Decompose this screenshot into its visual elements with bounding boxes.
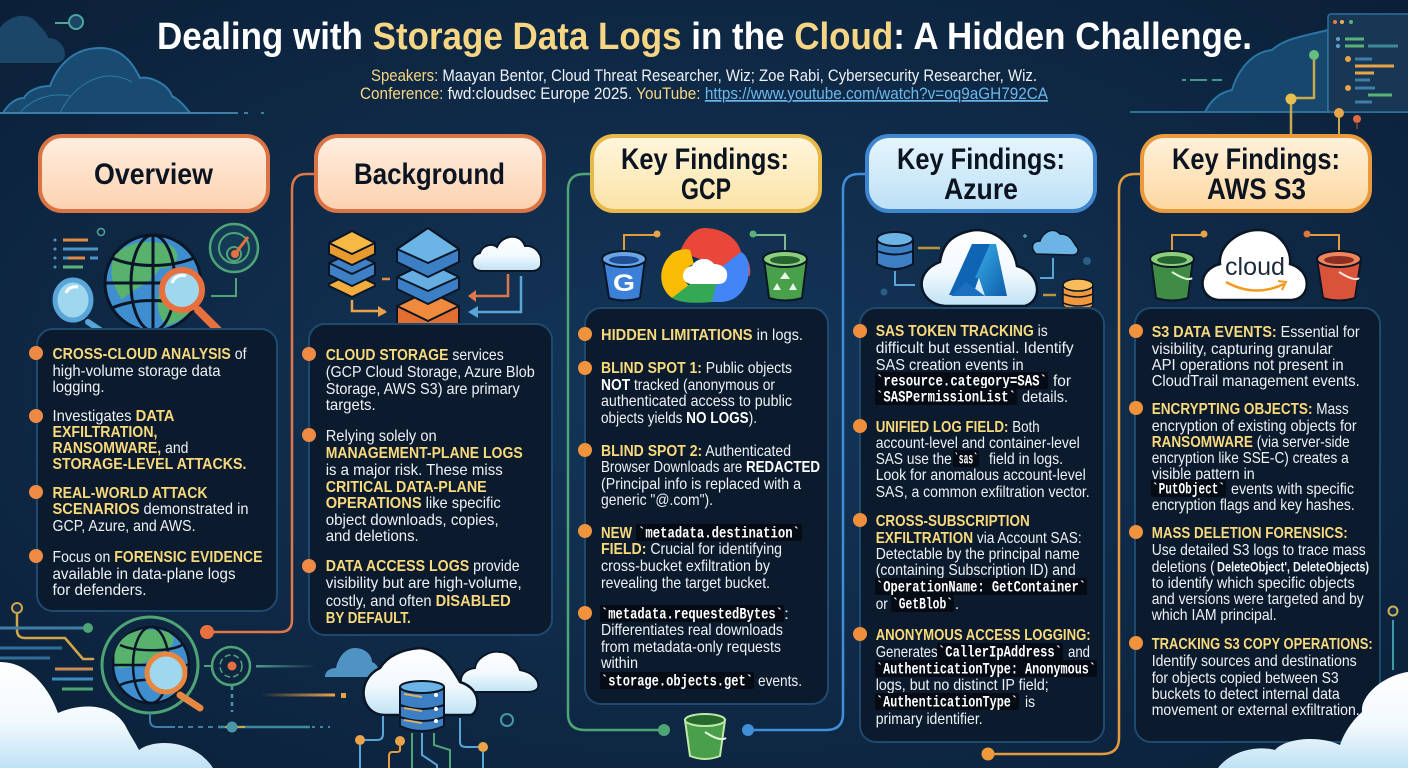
icon: storage stacks and cloud xyxy=(329,228,541,334)
heading: Key Findings Azure: Key Findings: xyxy=(897,143,1065,176)
item: unified log field xyxy=(853,419,1090,501)
item: s3 data events: CloudTrail management events. xyxy=(1152,373,1360,390)
item: tracking s3 copy operations xyxy=(1129,636,1373,719)
item: cross-subscription exfiltration: CROSS-SUBSCRIPTION xyxy=(876,513,1030,530)
item: tracking s3 copy operations: Identify sources and destinations xyxy=(1152,653,1357,670)
item: mass deletion forensics: MASS DELETION FORENSICS: xyxy=(1152,525,1348,542)
item: blind spot 1 xyxy=(578,360,792,427)
heading: Key Findings GCP xyxy=(592,136,820,211)
item: cloud storage: Storage, AWS S3) are primary xyxy=(326,381,520,398)
item: forensic evidence: for defenders. xyxy=(52,582,146,599)
item: metadata requestedBytes: events. xyxy=(758,673,802,690)
item: management-plane logs: Relying solely on xyxy=(326,428,437,445)
subtitle: conference and link: Conference: fwd:cloudsec Europe 2025. YouTube: https://www.youtube.com/watch?v=oq9aGH792CA xyxy=(360,84,1049,103)
heading: Key Findings GCP: GCP xyxy=(681,173,731,206)
icon: bottom green bucket xyxy=(685,714,726,759)
connector: background xyxy=(200,174,316,639)
decoration: top-right cloud and code window xyxy=(1130,14,1408,134)
item: forensic evidence xyxy=(29,549,263,599)
item: mass deletion forensics: Use detailed S3 logs to trace mass xyxy=(1152,542,1366,559)
item: anonymous access logging xyxy=(853,627,1097,728)
item: blind spot 1: objects yields NO LOGS). xyxy=(601,410,757,427)
item: real-world scenarios: REAL-WORLD ATTACK xyxy=(52,485,208,502)
item: anonymous access logging: is xyxy=(1025,694,1035,711)
panel: background xyxy=(302,324,552,635)
decoration: top-left clouds xyxy=(0,15,264,114)
item: management-plane logs: OPERATIONS like specific xyxy=(326,495,501,512)
item: cloud storage: (GCP Cloud Storage, Azure Blob xyxy=(326,364,535,381)
item: data access logs: DATA ACCESS LOGS provide xyxy=(326,558,520,575)
item: tracking s3 copy operations: movement or external exfiltration. xyxy=(1152,702,1360,719)
item: investigates: RANSOMWARE, and xyxy=(52,440,188,457)
heading: Overview xyxy=(40,136,268,211)
item: forensic evidence: Focus on FORENSIC EVIDENCE xyxy=(52,549,263,566)
item: metadata destination: revealing the target bucket. xyxy=(601,575,770,592)
item: investigates xyxy=(29,408,246,473)
item: cloud storage: CLOUD STORAGE services xyxy=(326,347,504,364)
item: anonymous access logging: ANONYMOUS ACCESS LOGGING: xyxy=(876,627,1091,644)
item: cross-cloud analysis xyxy=(29,346,247,396)
item: s3 data events: visibility, capturing granular xyxy=(1152,341,1333,358)
subtitle: speakers: Speakers: Maayan Bentor, Cloud Threat Researcher, Wiz; Zoe Rabi, Cybersecurity Researcher, Wiz. xyxy=(371,66,1037,85)
heading: Overview: Overview xyxy=(94,158,214,191)
item: cross-subscription exfiltration: or xyxy=(876,596,888,613)
icon: globe with magnifiers and radar xyxy=(54,224,258,332)
panel: azure findings xyxy=(853,308,1104,742)
item: cross-cloud analysis: logging. xyxy=(52,379,104,396)
item: management-plane logs: is a major risk. These miss xyxy=(326,462,503,479)
item: blind spot 2: Browser Downloads are REDACTED xyxy=(601,459,820,476)
heading: Key Findings Azure xyxy=(867,136,1095,211)
item: metadata requestedBytes: : xyxy=(784,606,789,623)
icon: aws cloud with buckets: cloud xyxy=(1225,253,1285,281)
item: cross-cloud analysis: CROSS-CLOUD ANALYSIS of xyxy=(52,346,247,363)
item: s3 data events: API operations not present in xyxy=(1152,357,1344,374)
item: investigates: Investigates DATA xyxy=(52,408,175,425)
item: encrypting objects: `PutObject` xyxy=(1152,480,1225,498)
item: metadata requestedBytes: Differentiates real downloads xyxy=(601,622,783,639)
heading: Key Findings AWS S3 xyxy=(1142,136,1370,211)
item: sas token tracking: details. xyxy=(1022,389,1068,406)
icon: google cloud with buckets xyxy=(602,228,807,303)
decoration: bottom-right cloud xyxy=(1218,672,1408,768)
item: sas token tracking: SAS TOKEN TRACKING is xyxy=(876,323,1048,340)
icon: bottom globe with magnifier xyxy=(102,617,346,732)
item: management-plane logs: CRITICAL DATA-PLANE xyxy=(326,479,487,496)
item: management-plane logs: MANAGEMENT-PLANE LOGS xyxy=(326,445,523,462)
item: real-world scenarios xyxy=(29,485,248,535)
item: cloud storage xyxy=(302,347,535,414)
decoration: bottom-left cloud xyxy=(0,662,213,768)
item: tracking s3 copy operations: buckets to detect internal data xyxy=(1152,686,1340,703)
item: unified log field: SAS, a common exfiltration vector. xyxy=(876,484,1090,501)
icon: google cloud with buckets: G xyxy=(613,270,635,297)
item: sas token tracking: SAS creation events in xyxy=(876,357,1024,374)
item: metadata destination: `metadata.destination` xyxy=(638,524,800,542)
item: cross-subscription exfiltration: EXFILTRATION via Account SAS: xyxy=(876,530,1082,547)
item: encrypting objects: RANSOMWARE (via server-side xyxy=(1152,434,1350,451)
item: blind spot 2: generic "@.com"). xyxy=(601,492,713,509)
item: encrypting objects: encryption flags and key hashes. xyxy=(1152,497,1355,514)
heading: Key Findings GCP: Key Findings: xyxy=(621,143,789,176)
item: metadata destination: NEW xyxy=(601,525,633,542)
item: investigates: EXFILTRATION, xyxy=(52,424,158,441)
item: data access logs xyxy=(302,558,522,627)
connector: aws xyxy=(982,174,1142,760)
icon: azure cloud with databases xyxy=(877,230,1093,311)
panel: aws s3 findings xyxy=(1129,308,1380,742)
decoration: left circuit lines xyxy=(0,603,93,689)
item: blind spot 1: BLIND SPOT 1: Public objects xyxy=(601,360,792,377)
item: encrypting objects: encryption of existing objects for xyxy=(1152,418,1357,435)
item: unified log field: account-level and container-level xyxy=(876,435,1080,452)
item: data access logs: BY DEFAULT. xyxy=(326,610,411,627)
item: mass deletion forensics: deletions ( xyxy=(1152,559,1215,576)
item: mass deletion forensics xyxy=(1129,525,1369,624)
item: forensic evidence: available in data-plane logs xyxy=(52,566,236,583)
item: real-world scenarios: SCENARIOS demonstrated in xyxy=(52,501,248,518)
item: metadata destination xyxy=(578,524,802,592)
item: sas token tracking: for xyxy=(1053,373,1072,390)
item: blind spot 1: NOT tracked (anonymous or xyxy=(601,377,776,394)
item: anonymous access logging: `AuthenticationType` xyxy=(876,694,1018,712)
heading: Background xyxy=(316,136,544,211)
item: real-world scenarios: GCP, Azure, and AWS. xyxy=(52,518,196,535)
panel: overview xyxy=(29,329,277,611)
item: encrypting objects xyxy=(1129,401,1357,514)
item: data access logs: costly, and often DISABLED xyxy=(326,593,511,610)
heading: Background: Background xyxy=(354,158,505,191)
item: management-plane logs: and deletions. xyxy=(326,528,419,545)
item: mass deletion forensics: and versions were targeted and by xyxy=(1152,591,1364,608)
item: unified log field: SAS use the xyxy=(876,451,952,468)
item: anonymous access logging: and xyxy=(1068,644,1090,661)
item: blind spot 2 xyxy=(578,443,820,509)
item: hidden limitations: HIDDEN LIMITATIONS in logs. xyxy=(601,327,803,344)
item: cross-subscription exfiltration: (containing Subscription ID) and xyxy=(876,562,1076,579)
item: cross-cloud analysis: high-volume storage data xyxy=(52,363,221,380)
item: cross-subscription exfiltration: `GetBlob` xyxy=(892,596,953,614)
item: cross-subscription exfiltration xyxy=(853,513,1087,614)
item: encrypting objects: encryption like SSE-C) creates a xyxy=(1152,450,1349,467)
item: sas token tracking: difficult but essential. Identify xyxy=(876,340,1074,357)
item: encrypting objects: visible pattern in xyxy=(1152,466,1255,483)
icon: aws cloud with buckets xyxy=(1150,230,1361,300)
item: metadata requestedBytes: from metadata-only requests xyxy=(601,639,781,656)
item: anonymous access logging: `CallerIpAddress` xyxy=(938,644,1062,662)
item: cross-subscription exfiltration: Detectable by the principal name xyxy=(876,546,1080,563)
item: metadata requestedBytes: `metadata.requestedBytes` xyxy=(601,606,783,624)
item: cross-subscription exfiltration: `OperationName: GetContainer` xyxy=(876,578,1086,596)
item: unified log field: `sas` xyxy=(954,450,978,468)
item: blind spot 2: (Principal info is replaced with a xyxy=(601,476,801,493)
item: mass deletion forensics: DeleteObject', xyxy=(1217,558,1290,574)
connector: gcp xyxy=(568,174,670,736)
item: anonymous access logging: primary identifier. xyxy=(876,711,983,728)
item: unified log field: UNIFIED LOG FIELD: Both xyxy=(876,419,1040,436)
item: tracking s3 copy operations: for objects copied between S3 xyxy=(1152,670,1339,687)
icon: bottom cloud with database xyxy=(325,648,538,768)
item: encrypting objects: ENCRYPTING OBJECTS: Mass xyxy=(1152,401,1349,418)
item: unified log field: field in logs. xyxy=(989,451,1063,468)
item: s3 data events: S3 DATA EVENTS: Essential for xyxy=(1152,324,1360,341)
item: unified log field: Look for anomalous account-level xyxy=(876,467,1086,484)
connector: azure xyxy=(742,174,866,736)
item: encrypting objects: events with specific xyxy=(1231,481,1354,498)
item: mass deletion forensics: which IAM principal. xyxy=(1151,607,1277,624)
panel: gcp findings xyxy=(578,308,828,704)
item: management-plane logs xyxy=(302,428,523,545)
item: investigates: STORAGE-LEVEL ATTACKS. xyxy=(52,456,246,473)
item: blind spot 2: BLIND SPOT 2: Authenticated xyxy=(601,443,791,460)
item: anonymous access logging: `AuthenticationType: Anonymous` xyxy=(876,660,1096,678)
heading: Key Findings AWS S3: Key Findings: xyxy=(1172,143,1340,176)
item: management-plane logs: object downloads, copies, xyxy=(326,512,499,529)
item: blind spot 1: authenticated access to public xyxy=(601,393,792,410)
item: cloud storage: targets. xyxy=(326,397,376,414)
item: cross-subscription exfiltration: . xyxy=(955,596,959,613)
item: data access logs: visibility but are high-volume, xyxy=(326,575,522,592)
item: sas token tracking xyxy=(853,323,1074,406)
heading: Key Findings Azure: Azure xyxy=(944,173,1018,206)
item: anonymous access logging: Generates xyxy=(876,644,938,661)
item: metadata destination: FIELD: Crucial for identifying xyxy=(601,541,782,558)
item: metadata requestedBytes xyxy=(578,605,802,690)
item: mass deletion forensics: to identify which specific objects xyxy=(1152,575,1355,592)
heading: Key Findings AWS S3: AWS S3 xyxy=(1207,173,1306,206)
item: sas token tracking: `resource.category=SAS` xyxy=(876,372,1047,390)
item: mass deletion forensics: DeleteObjects) xyxy=(1293,558,1369,574)
item: metadata requestedBytes: within xyxy=(600,655,638,672)
item: sas token tracking: `SASPermissionList` xyxy=(876,388,1016,406)
decoration: right circuit xyxy=(1388,606,1398,670)
item: metadata requestedBytes: `storage.objects.get` xyxy=(601,672,753,690)
item: metadata destination: cross-bucket exfiltration by xyxy=(601,558,770,575)
item: s3 data events xyxy=(1129,324,1360,390)
item: anonymous access logging: logs, but no distinct IP field; xyxy=(876,677,1049,694)
title: Dealing with Storage Data Logs in the Cloud: A Hidden Challenge. xyxy=(157,16,1252,58)
